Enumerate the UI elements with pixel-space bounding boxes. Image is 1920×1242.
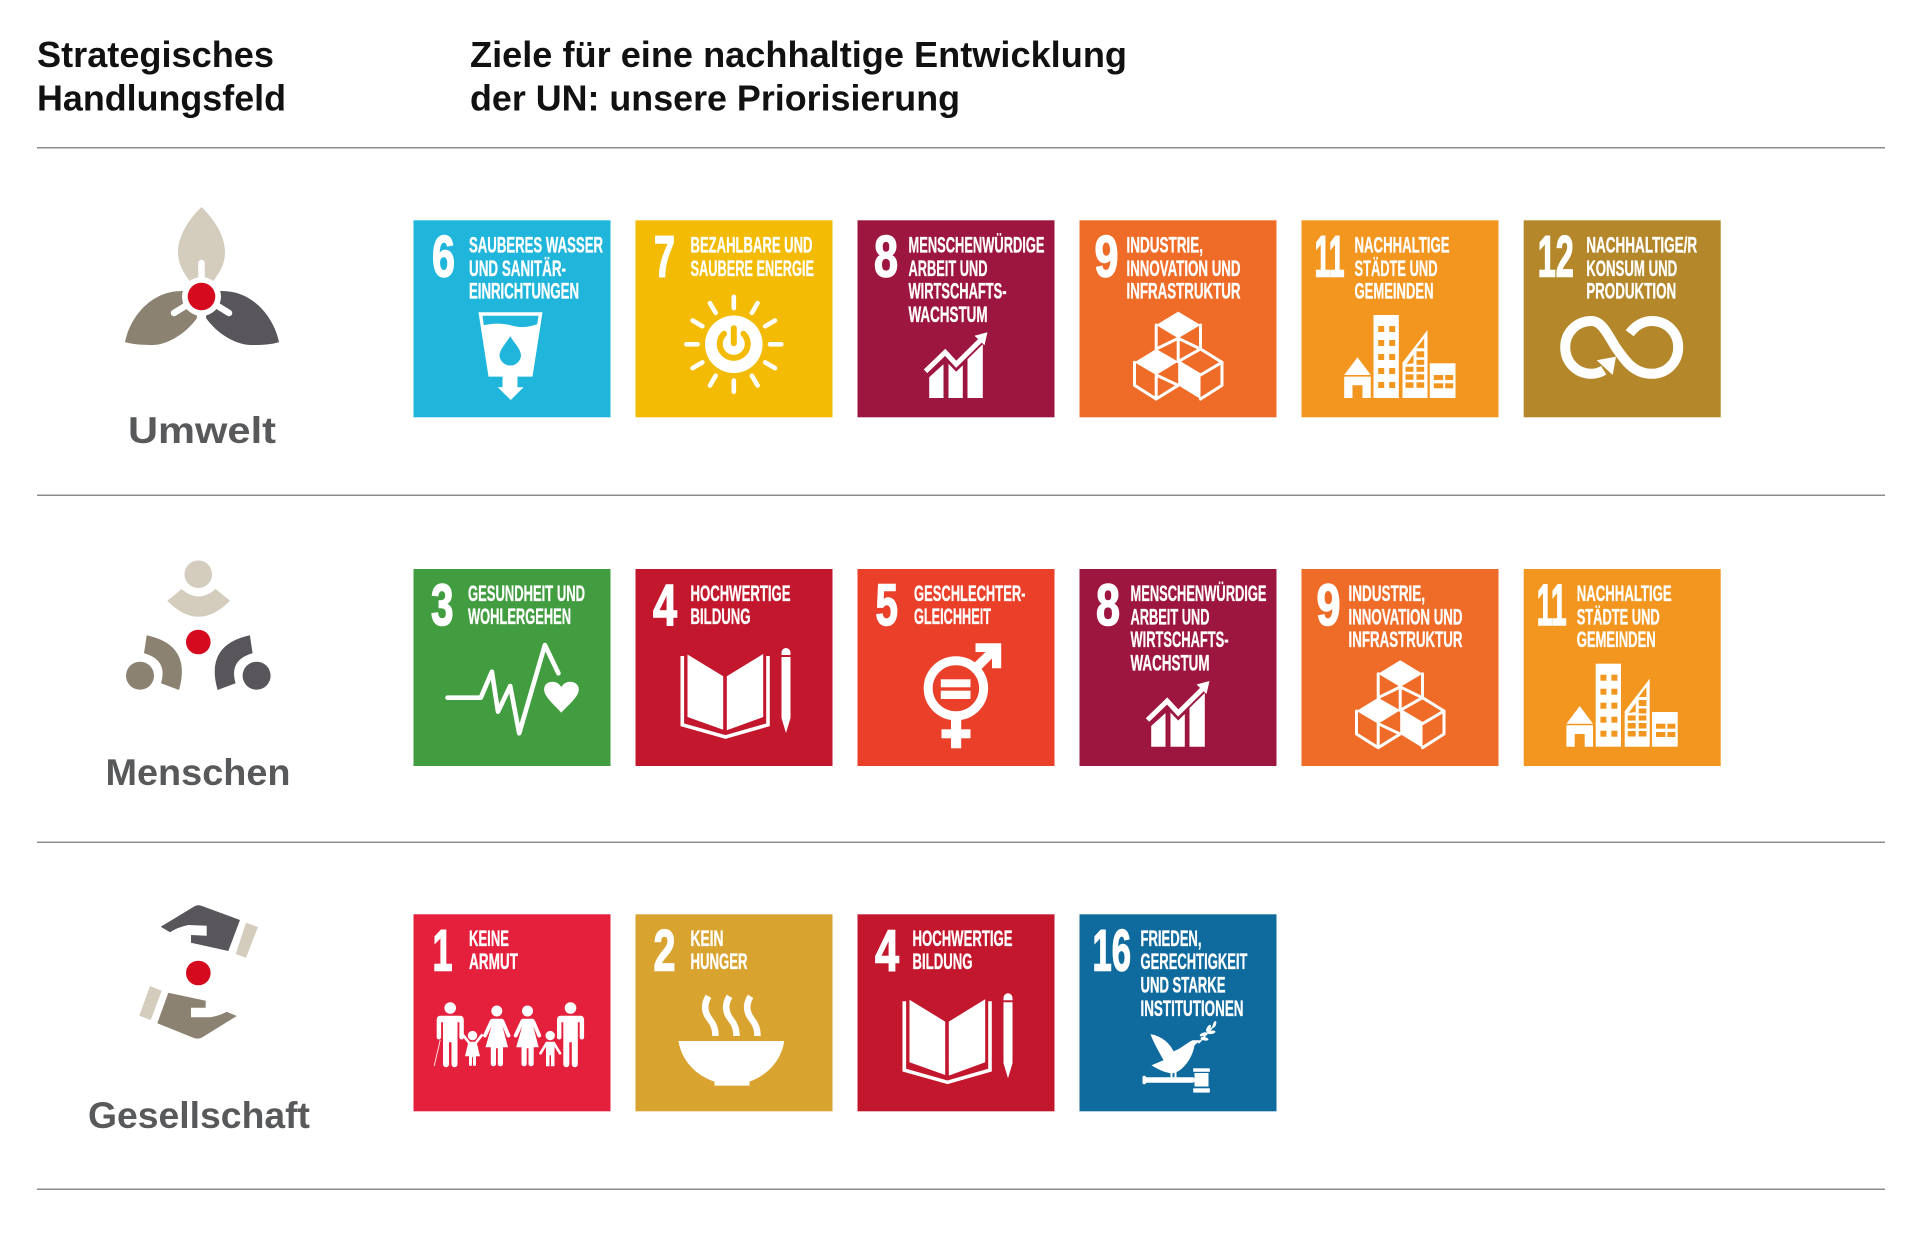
tile: goal 8: 8 [874, 224, 898, 289]
icon: dove and gavel [1142, 1020, 1217, 1093]
tile: goal 9: 9 [1094, 224, 1118, 289]
tile: goal 5: GLEICHHEIT [914, 604, 991, 629]
tile: goal 8: MENSCHENWÜRDIGE [908, 233, 1044, 258]
tile: goal 11 [1302, 220, 1498, 417]
tile: goal 12: KONSUM UND [1586, 256, 1677, 281]
tile: goal 8: WACHSTUM [1130, 651, 1210, 676]
icon: family [434, 1002, 584, 1067]
tile: goal 6: 6 [432, 224, 455, 289]
tile: goal 9: INDUSTRIE, [1126, 233, 1203, 258]
tile: goal 9: 9 [1316, 573, 1340, 638]
label: Gesellschaft: Gesellschaft [88, 1095, 310, 1136]
icon: Gesellschaft [139, 905, 258, 1039]
tile: goal 8: MENSCHENWÜRDIGE [1130, 581, 1266, 606]
heading: Strategisches Handlungsfeld: Handlungsfeld [37, 78, 286, 119]
tile: goal 6: EINRICHTUNGEN [469, 279, 579, 304]
tile: goal 1: KEINE [469, 926, 509, 951]
tile: goal 9: INNOVATION UND [1126, 256, 1240, 281]
icon: growth chart [926, 332, 988, 398]
tile: goal 8 [1080, 569, 1276, 766]
heading: Strategisches Handlungsfeld: Strategisches [37, 34, 274, 75]
tile: goal 8: ARBEIT UND [1130, 604, 1210, 629]
tile: goal 11: STÄDTE UND [1577, 604, 1660, 629]
tile: goal 8 [858, 220, 1054, 417]
tile: goal 4 [636, 569, 832, 766]
icon: cubes [1356, 660, 1444, 748]
tile: goal 12: NACHHALTIGE/R [1586, 233, 1697, 258]
tile: goal 6: SAUBERES WASSER [469, 233, 603, 258]
tile: goal 12: PRODUKTION [1586, 279, 1676, 304]
tile: goal 3: GESUNDHEIT UND [468, 581, 585, 606]
icon: book and pencil [682, 648, 790, 737]
icon: sun with power symbol [686, 297, 781, 392]
icon: infinity loop [1565, 321, 1678, 375]
tile: goal 3: WOHLERGEHEN [468, 604, 571, 629]
tile: goal 11: 11 [1537, 573, 1567, 638]
tile: goal 12 [1524, 220, 1721, 417]
row: Umwelt goals [414, 220, 1721, 417]
icon: cubes [1134, 312, 1222, 399]
tile: goal 8: WIRTSCHAFTS- [908, 279, 1006, 304]
tile: goal 5 [858, 569, 1054, 766]
heading: Ziele für eine nachhaltige Entwicklung [470, 34, 1127, 119]
icon: Umwelt [125, 207, 279, 345]
icon: Menschen [126, 560, 271, 690]
tile: goal 9: INFRASTRUKTUR [1348, 627, 1462, 652]
tile: goal 4: HOCHWERTIGE [912, 926, 1012, 951]
tile: goal 4: BILDUNG [912, 949, 972, 974]
icon: gender equality [928, 643, 1001, 748]
tile: goal 3 [414, 569, 610, 766]
tile: goal 11: NACHHALTIGE [1577, 581, 1672, 606]
icon: heartbeat [448, 645, 579, 733]
tile: goal 7: BEZAHLBARE UND [690, 233, 812, 258]
tile: goal 16: FRIEDEN, [1140, 926, 1202, 951]
heading: Ziele für eine nachhaltige Entwicklung: der UN: unsere Priorisierung [470, 78, 960, 119]
tile: goal 9 [1080, 220, 1276, 417]
tile: goal 2: 2 [654, 918, 676, 983]
tile: goal 9: INFRASTRUKTUR [1126, 279, 1240, 304]
tile: goal 1: 1 [432, 918, 452, 983]
icon: city buildings [1566, 664, 1678, 747]
tile: goal 16: 16 [1092, 918, 1131, 983]
tile: goal 4: BILDUNG [690, 604, 750, 629]
tile: goal 2: KEIN [690, 926, 724, 951]
tile: goal 2 [636, 914, 832, 1111]
tile: goal 2: HUNGER [690, 949, 748, 974]
tile: goal 5: 5 [876, 573, 898, 638]
tile: goal 9: INDUSTRIE, [1348, 581, 1425, 606]
tile: goal 12: 12 [1538, 224, 1574, 289]
tile: goal 4: HOCHWERTIGE [690, 581, 790, 606]
tile: goal 7 [636, 220, 832, 417]
tile: goal 4: 4 [653, 573, 677, 638]
label: Umwelt: Umwelt [128, 410, 276, 451]
tile: goal 11: 11 [1314, 224, 1344, 289]
tile: goal 11 [1524, 569, 1721, 766]
tile: goal 8: WACHSTUM [908, 302, 988, 327]
tile: goal 11: GEMEINDEN [1354, 279, 1434, 304]
icon: city buildings [1344, 315, 1456, 398]
tile: goal 9 [1302, 569, 1498, 766]
tile: goal 9: INNOVATION UND [1348, 604, 1462, 629]
tile: goal 1 [414, 914, 610, 1111]
tile: goal 5: GESCHLECHTER- [914, 581, 1026, 606]
icon: book and pencil [904, 993, 1012, 1082]
tile: goal 3: 3 [431, 573, 454, 638]
tile: goal 7: SAUBERE ENERGIE [690, 256, 814, 281]
heading: Strategisches Handlungsfeld [37, 34, 286, 119]
icon: steaming bowl [678, 996, 784, 1086]
tile: goal 6: UND SANITÄR- [469, 256, 566, 281]
tile: goal 4: 4 [875, 918, 899, 983]
label: Menschen: Menschen [106, 752, 290, 793]
tile: goal 11: NACHHALTIGE [1354, 233, 1450, 258]
row: Menschen goals [414, 569, 1721, 766]
tile: goal 8: WIRTSCHAFTS- [1130, 627, 1228, 652]
icon: growth chart [1148, 681, 1210, 747]
tile: goal 11: STÄDTE UND [1354, 256, 1438, 281]
tile: goal 8: ARBEIT UND [908, 256, 988, 281]
tile: goal 16: UND STARKE [1140, 972, 1226, 997]
tile: goal 11: GEMEINDEN [1577, 627, 1656, 652]
tile: goal 7: 7 [654, 224, 675, 289]
tile: goal 16: GERECHTIGKEIT [1140, 949, 1248, 974]
tile: goal 8: 8 [1096, 573, 1120, 638]
tile: goal 16 [1080, 914, 1276, 1111]
tile: goal 16: INSTITUTIONEN [1140, 996, 1244, 1021]
icon: water glass [478, 312, 542, 400]
row: Gesellschaft goals [414, 914, 1276, 1111]
tile: goal 6 [414, 220, 610, 417]
tile: goal 1: ARMUT [469, 949, 518, 974]
tile: goal 4 [858, 914, 1054, 1111]
heading: Ziele für eine nachhaltige Entwicklung: Ziele für eine nachhaltige Entwicklung [470, 34, 1127, 75]
